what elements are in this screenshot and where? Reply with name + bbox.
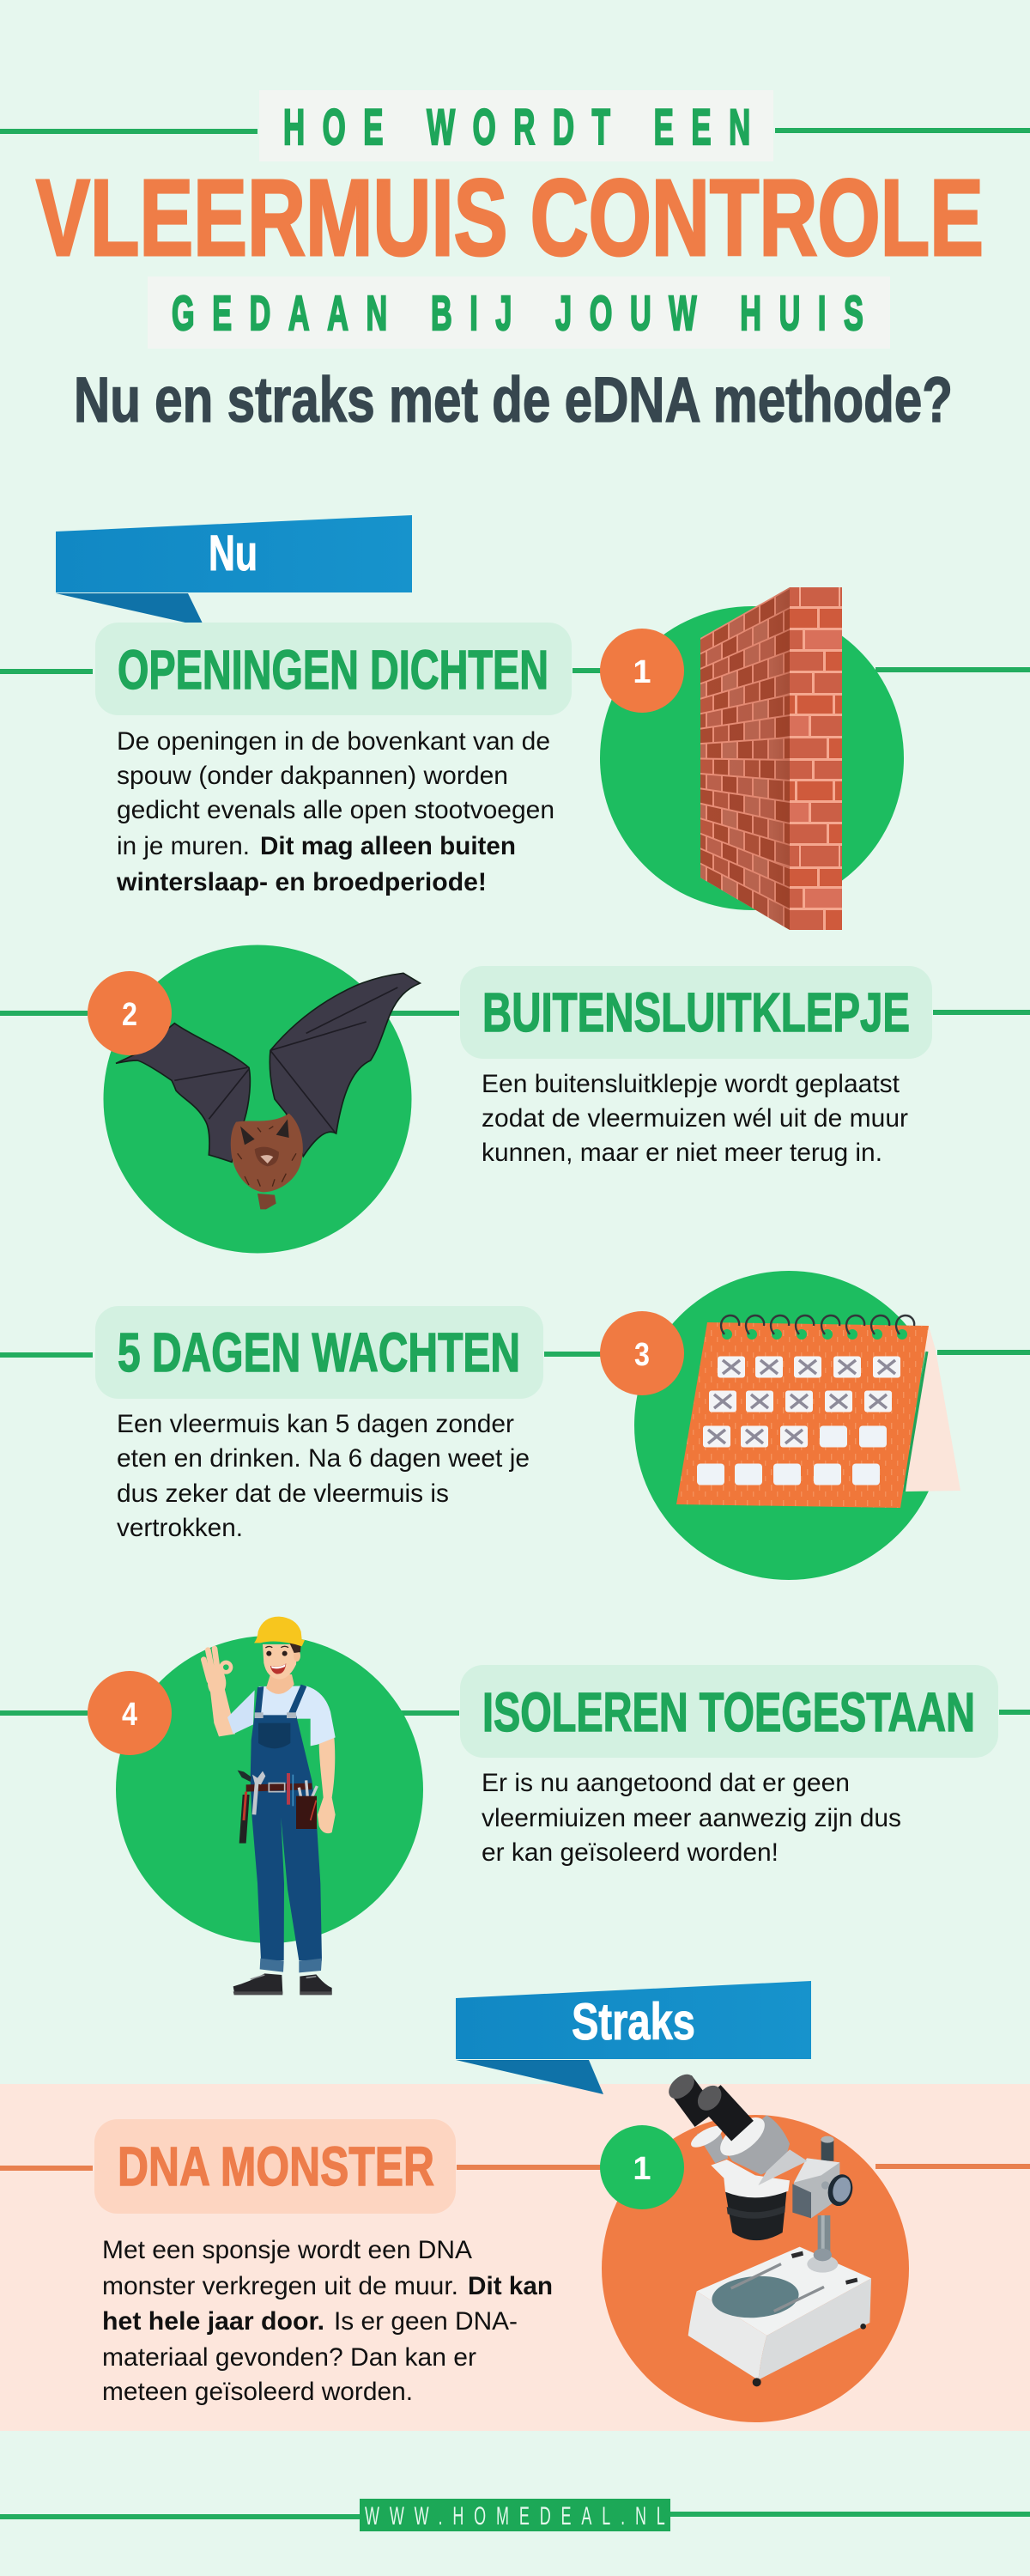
text block: step 3: eten en drinken. Na 6 dagen weet je <box>117 1444 530 1473</box>
circle: step 3 <box>634 1271 943 1580</box>
heading pill: openingen dichten <box>95 623 572 715</box>
text block: step 1: in je muren. <box>117 832 250 860</box>
text block: dna monster: materiaal gevonden? Dan kan er <box>102 2343 476 2372</box>
panel: step 3 5 dagen wachten <box>0 1271 1030 1580</box>
text block: step 4: Er is nu aangetoond dat er geen <box>482 1769 850 1797</box>
icon: microscope <box>664 2069 871 2386</box>
heading pill: 5 dagen wachten: 5 DAGEN WACHTEN <box>118 1321 520 1383</box>
heading pill: openingen dichten: OPENINGEN DICHTEN <box>118 639 548 701</box>
text block: step 1: gedicht evenals alle open stootvoegen <box>117 796 554 824</box>
text block: dna monster: meteen geïsoleerd worden. <box>102 2378 413 2406</box>
text block: dna monster <box>102 2236 553 2406</box>
text block: step 1: spouw (onder dakpannen) worden <box>117 762 508 790</box>
text block: dna monster: monster verkregen uit de muur. <box>102 2272 458 2300</box>
badge: step 3: 3 <box>634 1337 650 1373</box>
icon: calendar <box>676 1315 960 1508</box>
text block: step 2: Een buitensluitklepje wordt geplaatst <box>482 1070 900 1098</box>
badge: step 4: 4 <box>122 1697 137 1733</box>
panel: straks dna monster <box>0 1981 1030 2431</box>
panel: step 4 isoleren toegestaan <box>0 1617 1030 1995</box>
banner: Straks <box>456 1981 811 2094</box>
footer: website: WWW.HOMEDEAL.NL <box>365 2503 665 2530</box>
panel: step 1 openingen dichten <box>0 587 1030 930</box>
circle: step 4 <box>116 1636 423 1943</box>
heading pill: dna monster <box>94 2119 456 2214</box>
text block: step 4 <box>482 1769 901 1867</box>
heading pill: isoleren toegestaan <box>460 1665 998 1758</box>
banner: Straks: Straks <box>572 1993 695 2050</box>
badge: step 1: 1 <box>633 654 651 690</box>
footer: website <box>0 2499 1030 2531</box>
icon: bat <box>116 973 420 1209</box>
panel: step 2 buitensluitklepje <box>0 945 1030 1254</box>
text block: step 4: vleermiuizen meer aanwezig zijn dus <box>482 1804 901 1832</box>
heading: intro line: HOE WORDT EEN <box>283 100 750 155</box>
text block: step 1: Dit mag alleen buiten <box>260 832 516 860</box>
text block: step 3: vertrokken. <box>117 1514 243 1542</box>
text block: step 2: kunnen, maar er niet meer terug in. <box>482 1139 882 1167</box>
badge: step 4 <box>88 1671 172 1755</box>
icon: worker <box>203 1617 336 1995</box>
heading: second line: GEDAAN BIJ JOUW HUIS <box>172 285 863 340</box>
heading pill: dna monster: DNA MONSTER <box>118 2136 434 2197</box>
text block: step 4: er kan geïsoleerd worden! <box>482 1838 779 1867</box>
text block: step 2 <box>482 1070 908 1167</box>
text block: step 3 <box>117 1410 530 1542</box>
icon: brick wall <box>700 587 842 930</box>
circle: step 1 <box>600 606 904 910</box>
badge: step 2 <box>88 971 172 1055</box>
circle: step 2 <box>103 945 412 1254</box>
text block: dna monster: Met een sponsje wordt een DNA <box>102 2236 472 2264</box>
badge: dna monster <box>600 2125 684 2209</box>
text block: step 3: Een vleermuis kan 5 dagen zonder <box>117 1410 514 1438</box>
badge: step 3 <box>600 1311 684 1395</box>
banner: Nu <box>56 515 412 627</box>
text block: step 3: dus zeker dat de vleermuis is <box>117 1479 449 1508</box>
text block: step 1: winterslaap- en broedperiode! <box>116 868 487 896</box>
text block: step 2: zodat de vleermuizen wél uit de muur <box>482 1104 908 1133</box>
badge: dna monster: 1 <box>633 2151 651 2187</box>
badge: step 2: 2 <box>122 997 137 1033</box>
circle: dna monster <box>602 2115 909 2422</box>
text block: dna monster: Dit kan <box>468 2272 553 2300</box>
heading pill: 5 dagen wachten <box>95 1306 543 1399</box>
text block: dna monster: het hele jaar door. <box>102 2307 324 2336</box>
panel: header <box>0 90 1030 435</box>
text block: step 1: De openingen in de bovenkant van de <box>117 727 550 756</box>
heading pill: buitensluitklepje <box>460 966 932 1059</box>
text block: step 1 <box>116 727 554 896</box>
text block: dna monster: Is er geen DNA- <box>334 2307 518 2336</box>
banner: Nu: Nu <box>209 526 258 581</box>
badge: step 1 <box>600 629 684 713</box>
